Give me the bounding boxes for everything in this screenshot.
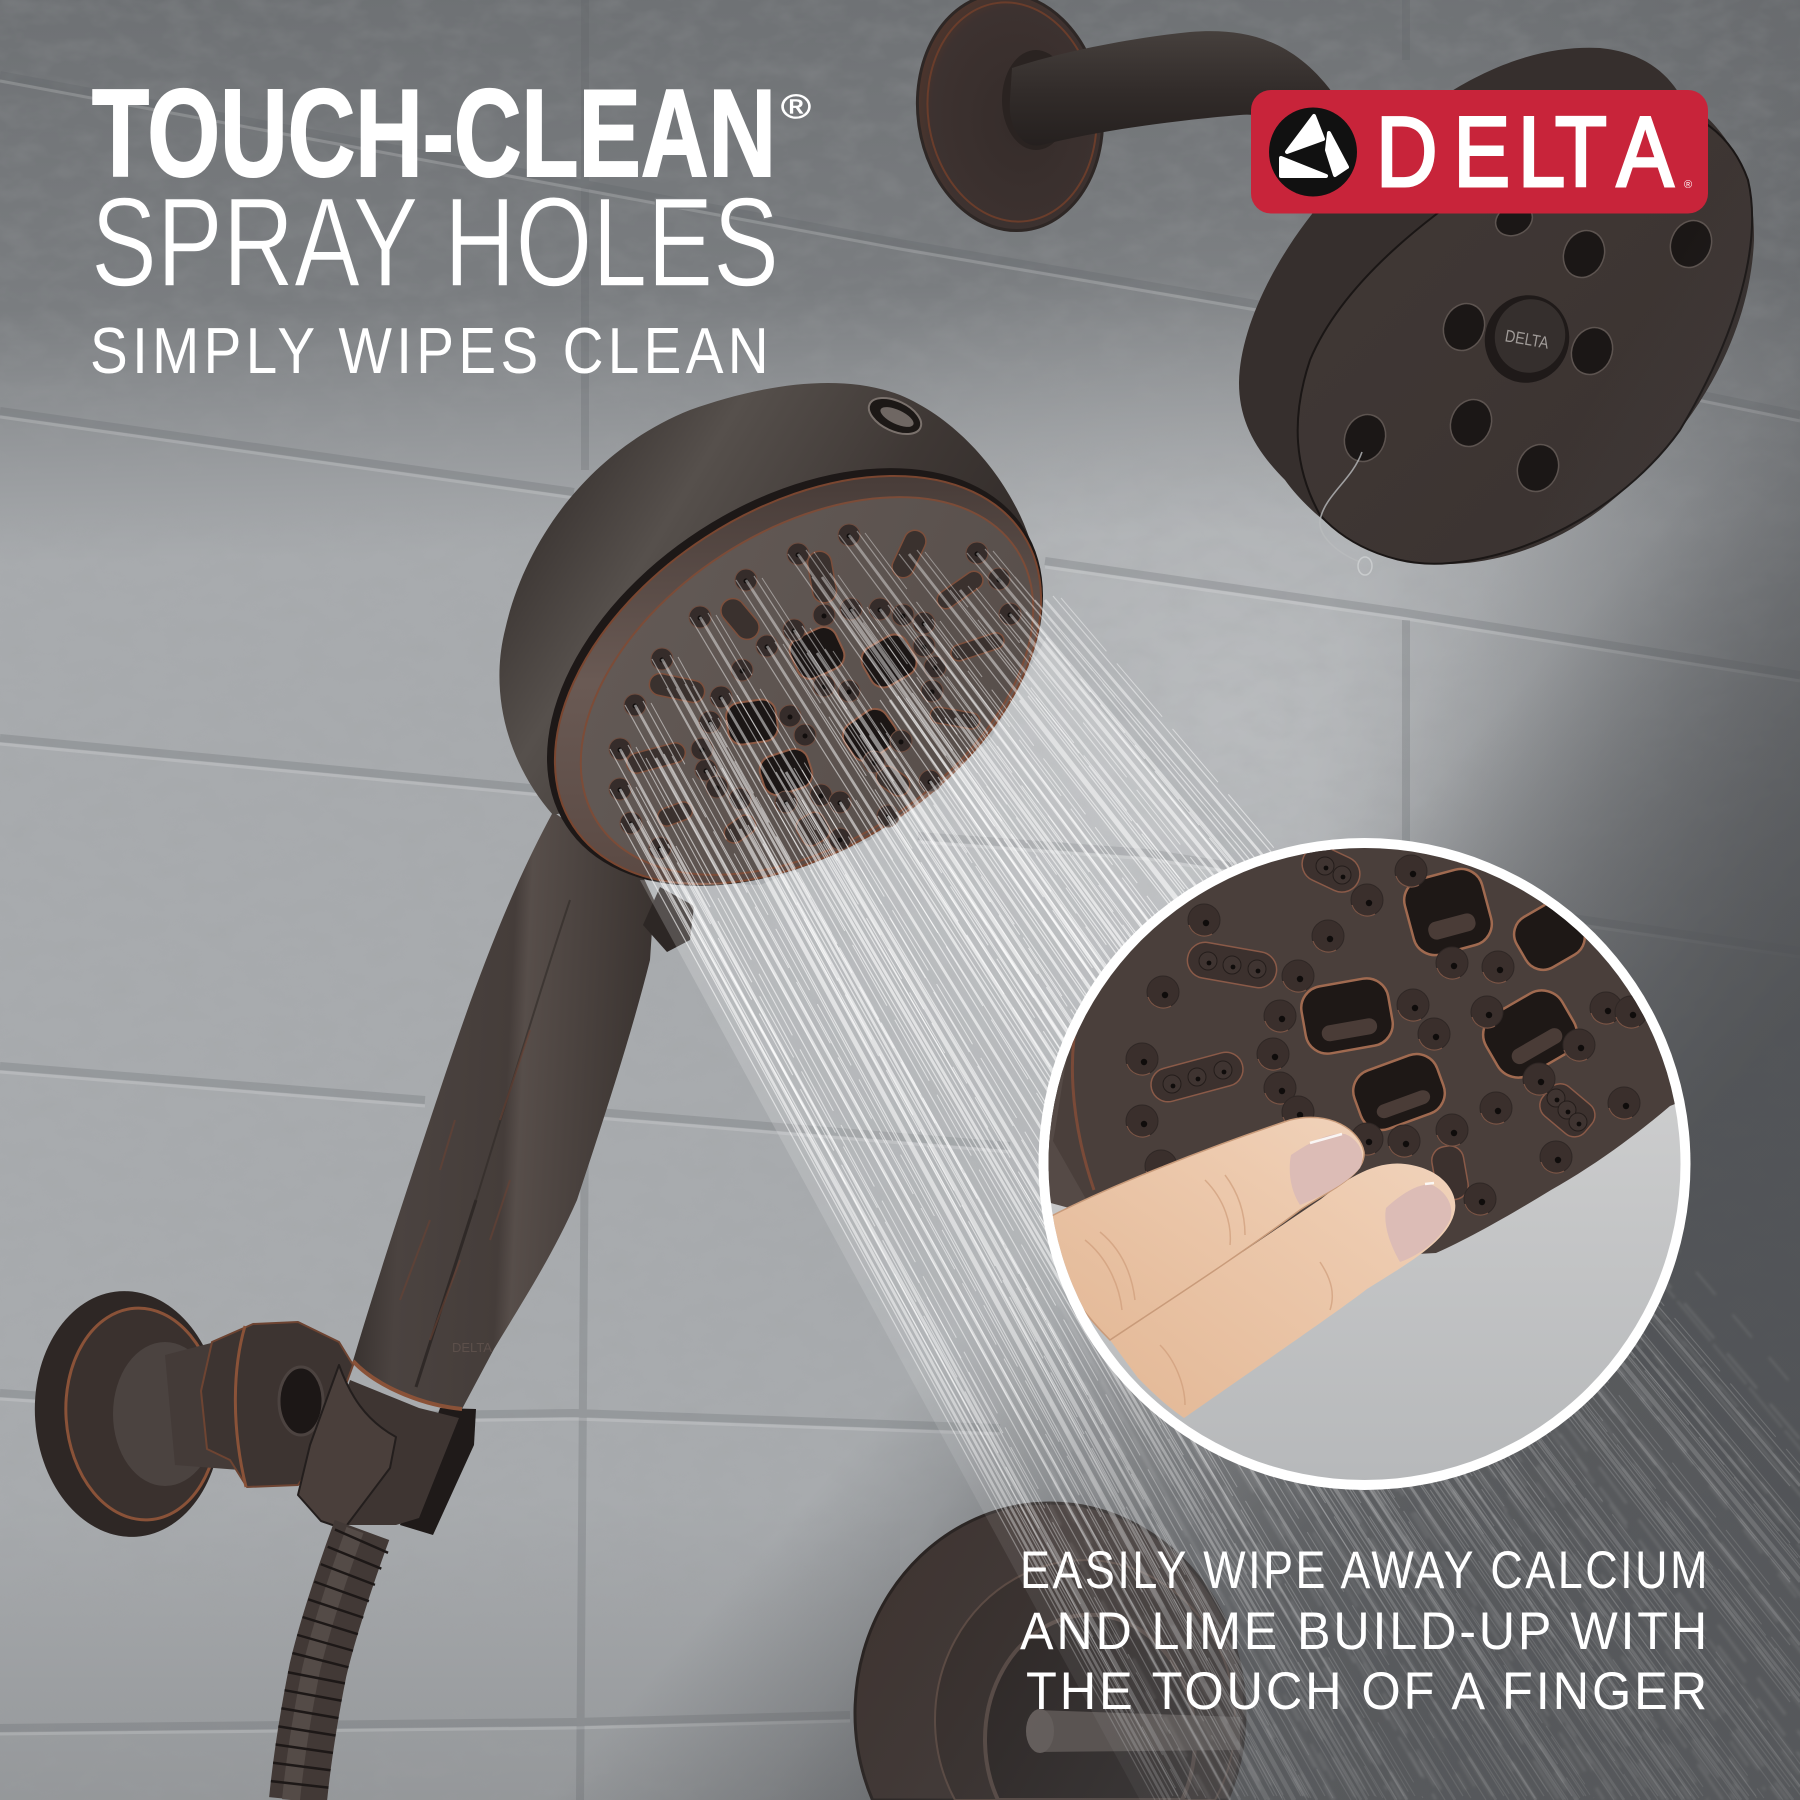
shower arm — [1010, 31, 1332, 150]
inset shower face — [1048, 848, 1675, 1254]
inset long slots — [1147, 840, 1601, 1202]
title: SPRAY HOLES: SPRAY HOLES — [91, 171, 779, 313]
logo emblem — [1269, 108, 1357, 196]
seam — [471, 382, 1119, 972]
title: TOUCH-CLEAN: TOUCH-CLEAN — [92, 65, 776, 203]
bottom callout text — [1020, 1541, 1710, 1721]
holder front — [298, 1365, 396, 1529]
handle imprint: DELTA — [452, 1340, 492, 1355]
Delta logo badge — [1251, 90, 1708, 214]
mode selector button — [863, 391, 927, 441]
fixed shower head assembly — [902, 0, 1754, 575]
water spray — [610, 531, 1800, 1800]
wall mount for hand shower — [27, 1285, 353, 1543]
holder centre — [330, 1380, 459, 1525]
mount neck — [165, 1342, 240, 1470]
inset large openings — [1298, 864, 1592, 1136]
centre badge: DELTA — [1504, 326, 1551, 353]
spray face — [512, 419, 1102, 953]
hand shower holder — [298, 1365, 476, 1535]
upper finger — [1040, 1117, 1364, 1340]
copper ring — [481, 391, 1115, 969]
shower head body — [1239, 48, 1754, 564]
nail highlights — [1310, 1134, 1434, 1184]
water drip — [1320, 452, 1362, 562]
bottom callout text: AND LIME BUILD-UP WITH — [1020, 1602, 1710, 1661]
nozzle bumps — [609, 524, 1021, 859]
inset white border — [1038, 838, 1690, 1490]
inset clipped photo — [1048, 848, 1680, 1480]
inset opening highlights — [1320, 912, 1565, 1120]
registered trademark: ® — [781, 88, 811, 126]
inset slot bumps — [1163, 857, 1587, 1131]
head body — [499, 383, 1030, 815]
inset nozzle bumps — [1126, 855, 1647, 1215]
spray trigger — [643, 887, 694, 952]
fingernails — [1290, 1134, 1451, 1262]
rain streaks over overlay — [1050, 1274, 1800, 1800]
magnified circular inset — [1030, 830, 1710, 1490]
jets on fixed head — [1337, 198, 1719, 498]
knuckle wrinkles — [1085, 1175, 1332, 1405]
mount flange — [27, 1285, 229, 1543]
flexible hose — [291, 1530, 362, 1800]
inset wall — [1040, 838, 1690, 1490]
spray nozzle slots — [624, 527, 1006, 849]
registered mark: ® — [1684, 179, 1692, 191]
bottom callout text: THE TOUCH OF A FINGER — [1026, 1662, 1710, 1721]
wall flange — [902, 0, 1118, 243]
logo wordmark: DELTA — [1376, 96, 1674, 207]
lower finger — [1110, 1163, 1455, 1418]
subtitle: SIMPLY WIPES CLEAN — [90, 314, 773, 387]
handle — [353, 812, 654, 1409]
bathtub valve trim — [855, 1503, 1245, 1800]
holder back — [400, 1408, 476, 1535]
centre badge — [1472, 283, 1582, 395]
large nozzle openings — [724, 622, 922, 799]
hand shower — [353, 382, 1119, 1409]
swivel knob — [201, 1322, 353, 1487]
shower head face — [1298, 105, 1752, 564]
